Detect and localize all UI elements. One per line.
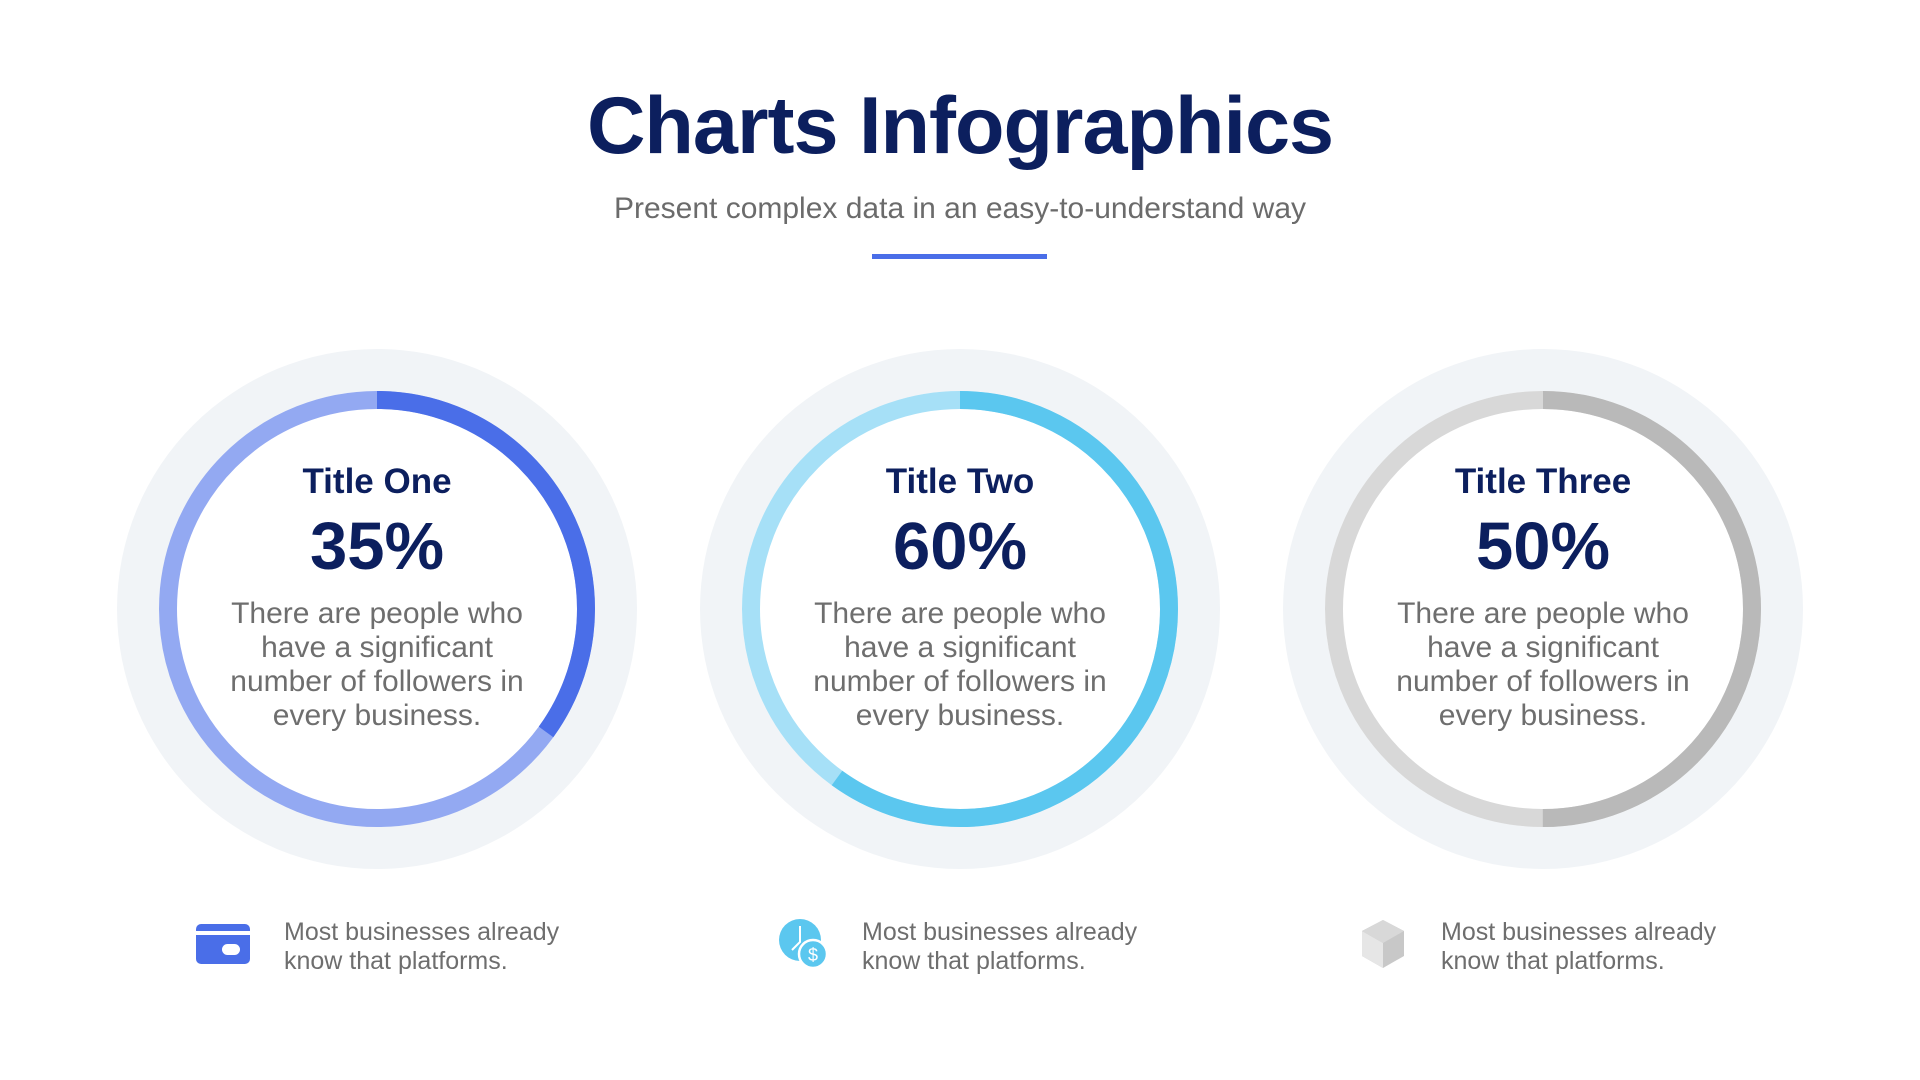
footer text 1 xyxy=(284,918,559,975)
text: title three: have a significant xyxy=(1427,631,1659,664)
text: title two xyxy=(813,462,1107,732)
footer text 3: know that platforms. xyxy=(1441,947,1665,975)
icon: card xyxy=(196,924,250,964)
text: title three xyxy=(1396,462,1690,732)
text: title three: number of followers in xyxy=(1396,665,1690,698)
footer text 1: know that platforms. xyxy=(284,947,508,975)
text: title one: There are people who xyxy=(231,597,523,630)
text: title one: Title One xyxy=(302,462,452,501)
text: title three: There are people who xyxy=(1397,597,1689,630)
footer text 3: Most businesses already xyxy=(1441,918,1716,946)
text: title one xyxy=(230,462,524,732)
chart: title one 35% xyxy=(117,349,637,869)
text: title three: Title Three xyxy=(1455,462,1631,501)
footer text 1: Most businesses already xyxy=(284,918,559,946)
text: title two: have a significant xyxy=(844,631,1076,664)
text: title one: every business. xyxy=(273,699,481,732)
chart: title two 60% xyxy=(700,349,1220,869)
text: title three: 50% xyxy=(1476,509,1610,584)
text: title two: every business. xyxy=(856,699,1064,732)
text: title two: Title Two xyxy=(886,462,1034,501)
subtitle: Present complex data in an easy-to-understand way xyxy=(614,192,1306,225)
text: title three: every business. xyxy=(1439,699,1647,732)
footer text 2 xyxy=(862,918,1137,975)
footer text 3 xyxy=(1441,918,1716,975)
icon: clock dollar xyxy=(779,919,826,967)
chart: title three 50% xyxy=(1283,349,1803,869)
footer text 2: know that platforms. xyxy=(862,947,1086,975)
accent line xyxy=(872,254,1047,259)
text: title one: 35% xyxy=(310,509,444,584)
title: Charts Infographics xyxy=(587,81,1333,171)
text: title two: There are people who xyxy=(814,597,1106,630)
text: title one: number of followers in xyxy=(230,665,524,698)
footer text 2: Most businesses already xyxy=(862,918,1137,946)
icon: clock dollar: $ xyxy=(808,945,818,965)
icon: box xyxy=(1362,920,1404,968)
text: title two: number of followers in xyxy=(813,665,1107,698)
text: title one: have a significant xyxy=(261,631,493,664)
text: title two: 60% xyxy=(893,509,1027,584)
